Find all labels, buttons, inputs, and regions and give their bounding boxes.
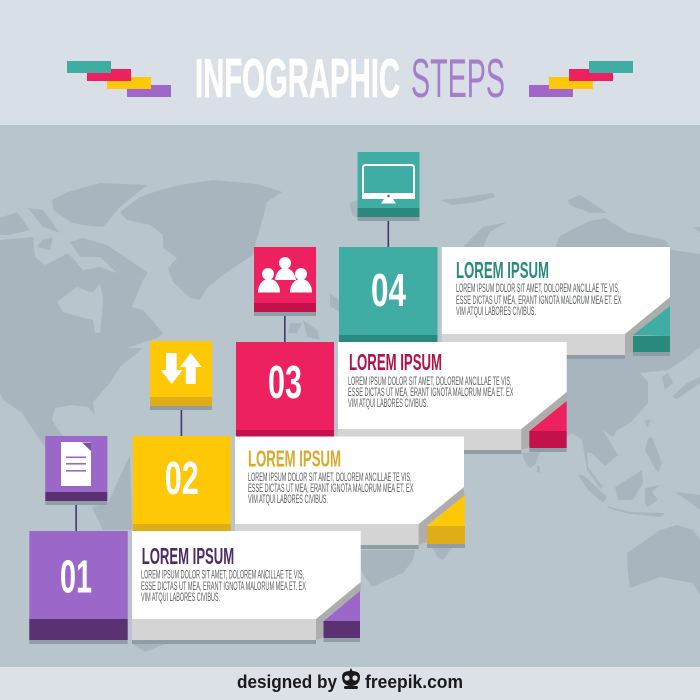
text card 03: LOREM IPSUM (349, 349, 442, 375)
text card 01 (132, 531, 361, 644)
connector line 03 (284, 312, 286, 342)
text card 02: VIM ATQUI LABORES CIVIBUS. (248, 494, 328, 506)
icon: freepik logo (342, 668, 360, 689)
number tile 01: 01 (60, 551, 92, 603)
step 04 (339, 152, 670, 359)
number tile 01 (29, 531, 128, 644)
text card 04: VIM ATQUI LABORES CIVIBUS. (456, 306, 536, 318)
footer credit (237, 668, 463, 692)
connector line 04 (388, 217, 389, 247)
header band (0, 0, 700, 125)
title: INFOGRAPHIC (195, 47, 400, 109)
text card 03 (338, 342, 567, 454)
map background panel (0, 125, 700, 667)
text card 01: ESSE DICTAS UT MEA, ERANT IGNOTA MALORUM MEA ET. EX (141, 581, 306, 593)
number tile 04: 04 (371, 264, 406, 316)
icon tile: monitor (358, 152, 420, 221)
connector line 01 (75, 501, 77, 531)
text card 01: VIM ATQUI LABORES CIVIBUS. (141, 592, 220, 604)
step 02 (133, 341, 465, 549)
connector line 02 (181, 406, 182, 436)
step 03 (236, 247, 567, 454)
icon tile: arrows (150, 341, 212, 410)
number tile 02: 02 (165, 452, 199, 504)
number tile 02 (133, 436, 231, 531)
text card 03: ESSE DICTAS UT MEA, ERANT IGNOTA MALORUM MEA ET. EX (348, 387, 514, 399)
text card 02 (235, 436, 465, 549)
world map (0, 180, 700, 652)
text card 03: VIM ATQUI LABORES CIVIBUS. (348, 398, 428, 410)
footer band (0, 667, 700, 700)
icon tile: people (254, 247, 316, 316)
title decoration: right stacked bars (529, 61, 633, 97)
text card 04: LOREM IPSUM (456, 257, 549, 283)
footer credit: designed by (237, 672, 337, 692)
text card 01: LOREM IPSUM (142, 543, 234, 569)
text card 03: LOREM IPSUM DOLOR SIT AMET, DOLOREM ANCILLAE TE VIS, (348, 376, 512, 388)
number tile 03: 03 (268, 356, 302, 408)
text card 02: LOREM IPSUM DOLOR SIT AMET, DOLOREM ANCILLAE TE VIS, (248, 472, 412, 484)
number tile 04 (339, 247, 438, 342)
icon tile: document (45, 436, 107, 505)
title decoration: left stacked bars (67, 61, 171, 97)
text card 02: LOREM IPSUM (248, 446, 341, 472)
title: STEPS (411, 47, 505, 109)
text card 02: ESSE DICTAS UT MEA, ERANT IGNOTA MALORUM MEA ET. EX (248, 483, 414, 495)
footer credit: freepik.com (365, 672, 463, 692)
text card 01: LOREM IPSUM DOLOR SIT AMET, DOLOREM ANCILLAE TE VIS, (141, 570, 304, 582)
text card 04 (442, 247, 670, 359)
number tile 03 (236, 342, 334, 437)
step 01 (29, 436, 361, 644)
